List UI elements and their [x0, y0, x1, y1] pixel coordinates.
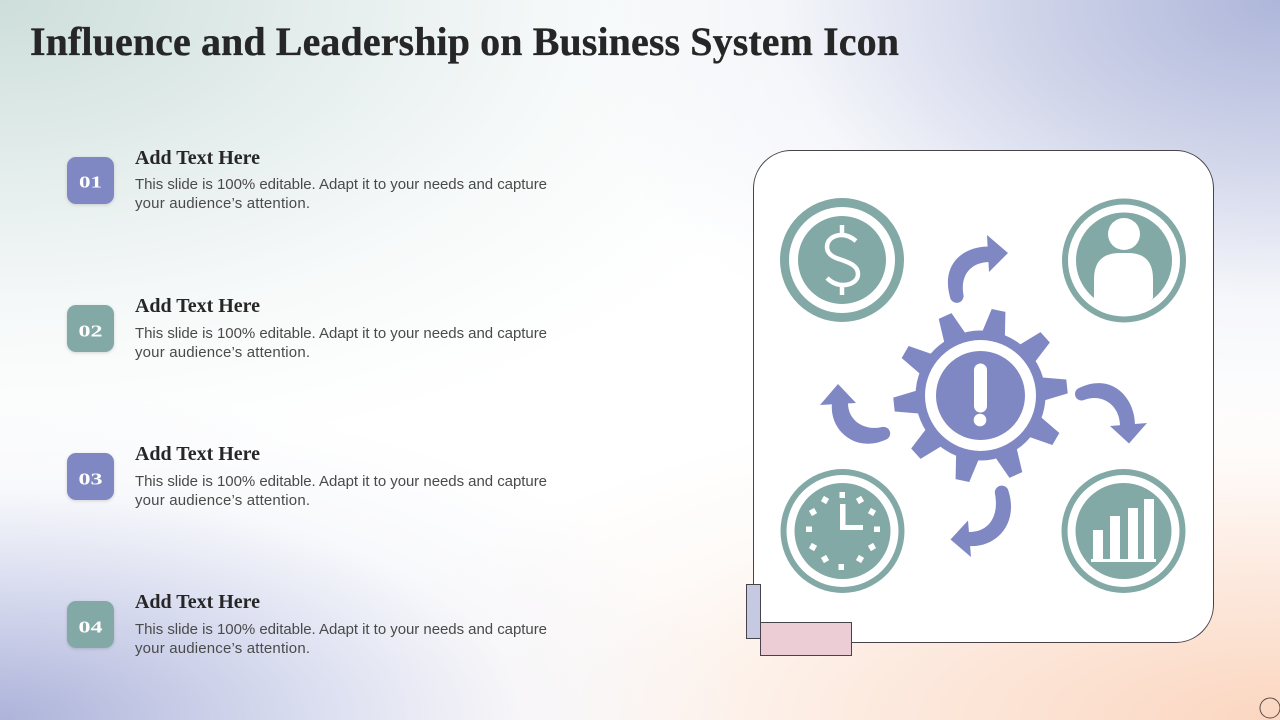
list item 04 [67, 591, 547, 657]
body text 03: This slide is 100% editable. Adapt it to your needs and capture [135, 473, 547, 490]
icon: person [1062, 198, 1186, 322]
arrow: bottom [950, 486, 1011, 557]
icon: bar chart [1062, 469, 1186, 593]
badge 03 [67, 453, 114, 500]
panel: icon card [754, 150, 1214, 642]
body text 03: your audience’s attention. [135, 492, 310, 509]
body text 04: your audience’s attention. [135, 640, 310, 657]
badge 02 [67, 305, 114, 352]
decorative tab: pink [760, 622, 852, 656]
icon: gear with exclamation [893, 308, 1068, 483]
icon: clock [780, 469, 904, 593]
corner circle marker [1260, 698, 1280, 718]
badge 01: 01 [79, 172, 102, 192]
heading 03: Add Text Here [135, 443, 260, 465]
heading 02: Add Text Here [135, 295, 260, 317]
body text 04: This slide is 100% editable. Adapt it to your needs and capture [135, 621, 547, 638]
decorative tab: blue [746, 584, 760, 638]
list item 02 [67, 295, 547, 361]
list item 03 [67, 443, 547, 509]
heading 04: Add Text Here [135, 591, 260, 613]
arrow: top [948, 235, 1008, 303]
icon: dollar coin [780, 198, 904, 322]
list item 01 [67, 147, 547, 212]
body text 02: This slide is 100% editable. Adapt it to your needs and capture [135, 325, 547, 342]
body text 02: your audience’s attention. [135, 344, 310, 361]
body text 01: This slide is 100% editable. Adapt it to your needs and capture [135, 176, 547, 193]
arrow: right [1075, 383, 1147, 444]
badge 03: 03 [78, 470, 102, 488]
badge 01 [67, 157, 114, 204]
badge 04 [67, 601, 114, 648]
badge 04: 04 [78, 618, 103, 636]
badge 02: 02 [78, 322, 102, 340]
body text 01: your audience’s attention. [135, 195, 310, 212]
arrow: left [820, 384, 890, 444]
heading 01: Add Text Here [135, 147, 260, 169]
title: Influence and Leadership on Business System Icon [30, 19, 899, 64]
